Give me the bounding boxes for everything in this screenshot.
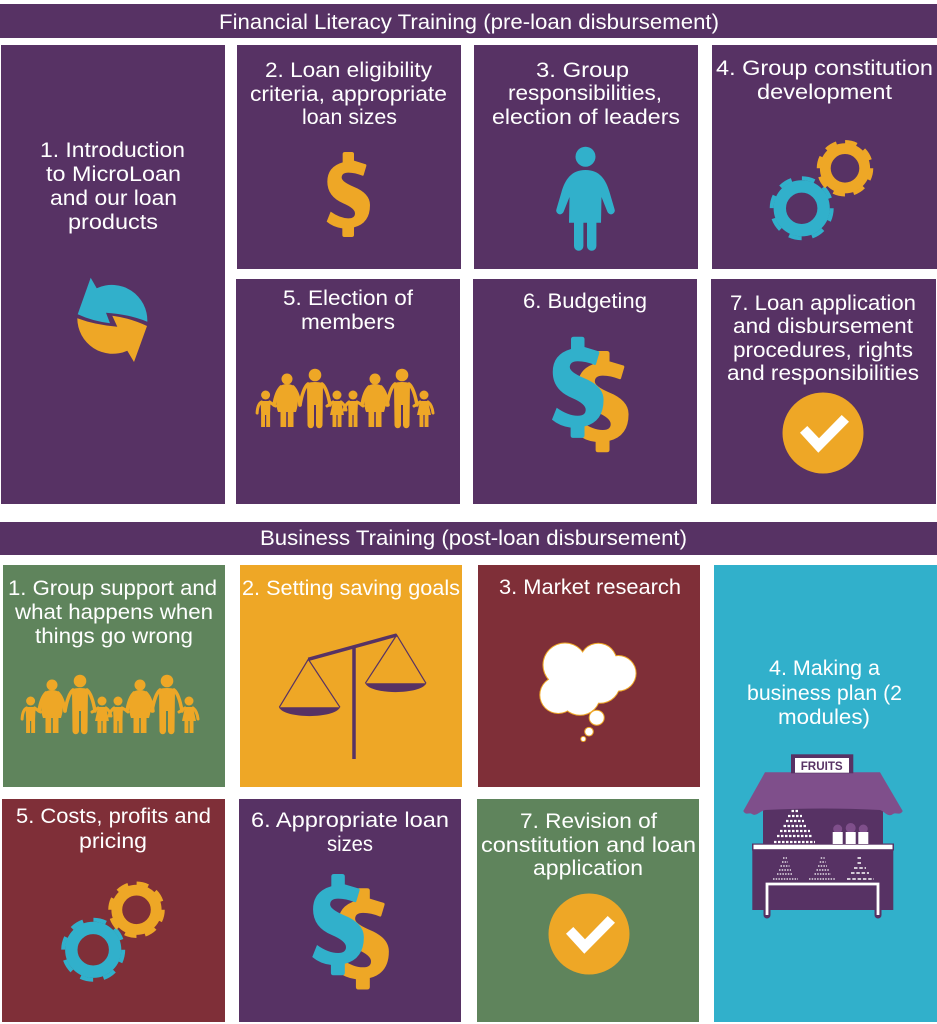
heading: election of members <box>283 287 413 334</box>
panel: 2 loan eligibility <box>237 45 461 269</box>
icon: family <box>22 675 198 734</box>
panel: b3 market research <box>478 565 700 787</box>
heading: introduction: to MicroLoan <box>46 163 181 186</box>
icon: fruit stall: FRUITS <box>801 759 843 773</box>
heading: loan eligibility: criteria, appropriate <box>250 83 447 106</box>
heading: business plan <box>747 657 902 729</box>
heading: revision of constitution: constitution and loan <box>481 834 696 857</box>
panel: 4 group constitution <box>712 45 937 269</box>
heading: group support: what happens when <box>14 601 213 624</box>
heading: loan application: and disbursement <box>733 315 913 338</box>
panel: 6 budgeting <box>473 279 697 504</box>
heading: costs profits pricing: pricing <box>79 830 147 853</box>
heading: loan eligibility <box>250 59 447 129</box>
panel: b5 costs profits pricing <box>2 799 225 1022</box>
heading: business plan: modules) <box>778 706 870 729</box>
heading: appropriate loan sizes: sizes <box>327 833 373 856</box>
heading: business plan: business plan (2 <box>747 682 902 705</box>
icon: check mark <box>548 894 630 974</box>
heading: election of members: members <box>301 311 395 334</box>
heading: appropriate loan sizes <box>251 809 449 856</box>
heading: loan application: 7. Loan application <box>730 292 916 315</box>
heading: group constitution <box>716 57 933 104</box>
heading: loan application: procedures, rights <box>733 339 913 362</box>
icon: check mark <box>782 392 864 474</box>
icon: person <box>556 147 615 251</box>
banner: financial literacy training: Financial Literacy Training (pre-loan disbursement) <box>219 11 719 34</box>
icon: dollar sign <box>327 152 370 237</box>
heading: group responsibilities <box>492 59 680 129</box>
heading: introduction: products <box>68 211 158 234</box>
heading: business plan: 4. Making a <box>769 657 880 680</box>
panel: b6 appropriate loan sizes <box>239 799 461 1022</box>
panel: b2 saving goals <box>240 565 462 787</box>
panel: b1 group support <box>3 565 225 787</box>
heading: introduction: 1. Introduction <box>40 139 185 162</box>
banner: business training <box>0 522 937 555</box>
heading: budgeting: 6. Budgeting <box>523 290 647 313</box>
heading: group support: 1. Group support and <box>8 577 217 600</box>
icon: family <box>257 369 433 428</box>
banner: financial literacy training <box>0 4 937 38</box>
panel: 3 group responsibilities <box>474 45 698 269</box>
heading: market research: 3. Market research <box>499 576 681 599</box>
heading: group constitution: 4. Group constitution <box>716 57 933 80</box>
icon: double dollar <box>312 874 389 990</box>
icon: double dollar <box>552 337 629 452</box>
icon: thought cloud <box>539 642 637 742</box>
icon: gears <box>63 883 163 980</box>
heading: loan application <box>727 292 919 385</box>
heading: group support <box>8 577 217 648</box>
panel: 5 election of members <box>236 279 460 504</box>
banner: business training: Business Training (post-loan disbursement) <box>260 527 687 550</box>
heading: revision of constitution: application <box>533 857 643 880</box>
heading: saving goals: 2. Setting saving goals <box>242 577 460 600</box>
heading: revision of constitution <box>481 810 696 880</box>
heading: group responsibilities: 3. Group <box>536 59 629 82</box>
heading: costs profits pricing <box>16 805 211 853</box>
panel: b4 business plan <box>714 565 937 1022</box>
heading: loan eligibility: loan sizes <box>302 106 397 129</box>
heading: revision of constitution: 7. Revision of <box>520 810 657 833</box>
heading: introduction <box>40 139 185 234</box>
heading: introduction: and our loan <box>50 187 177 210</box>
heading: group responsibilities: election of leaders <box>492 106 680 129</box>
heading: costs profits pricing: 5. Costs, profits and <box>16 805 211 828</box>
icon: balance scale <box>279 635 426 759</box>
panel: 7 loan application <box>711 279 936 504</box>
heading: loan eligibility: 2. Loan eligibility <box>265 59 433 82</box>
heading: loan application: and responsibilities <box>727 362 919 385</box>
icon: fruit stall <box>743 754 903 915</box>
panel: 1 introduction <box>1 45 225 504</box>
heading: election of members: 5. Election of <box>283 287 413 310</box>
heading: group responsibilities: responsibilities, <box>508 82 662 105</box>
icon: gears <box>772 142 872 238</box>
panel: b7 revision of constitution <box>477 799 699 1022</box>
heading: group constitution: development <box>757 81 892 104</box>
heading: appropriate loan sizes: 6. Appropriate loan <box>251 809 449 832</box>
icon: cycle arrows <box>77 278 147 362</box>
heading: group support: things go wrong <box>35 625 193 648</box>
